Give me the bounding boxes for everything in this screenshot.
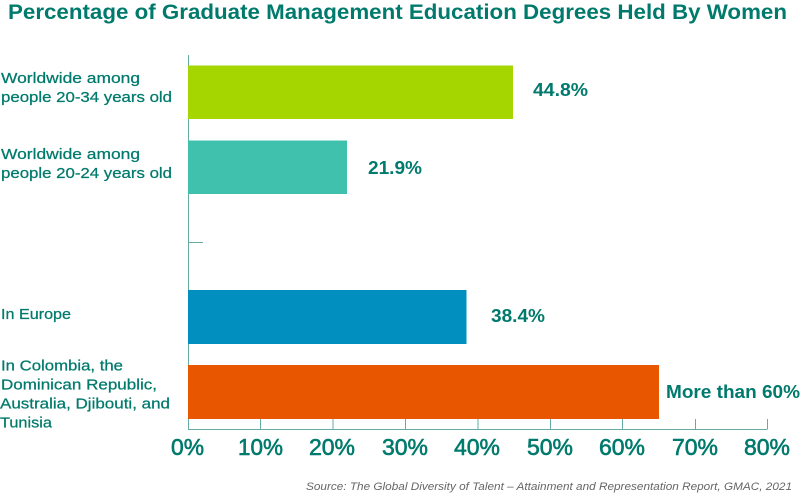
category label: worldwide 20-24: Worldwide among xyxy=(1,146,140,163)
value label: 21.9%: 21.9% xyxy=(368,158,422,178)
x axis labels: 70% xyxy=(672,434,718,460)
category label: worldwide 20-24 xyxy=(1,146,172,182)
bar: worldwide 20-34 xyxy=(188,66,513,119)
category label: worldwide 20-34 xyxy=(1,70,172,106)
bar: worldwide 20-24 xyxy=(188,140,347,194)
value label: more than 60%: More than 60% xyxy=(666,382,800,402)
source note: Source: The Global Diversity of Talent – Attainment and Representation Report, GMAC, 2021 xyxy=(306,481,792,493)
category label: Colombia and others xyxy=(0,358,170,432)
x axis labels: 60% xyxy=(599,434,645,460)
x axis labels: 20% xyxy=(309,434,355,460)
value label: 44.8%: 44.8% xyxy=(533,80,588,100)
x axis labels xyxy=(171,434,790,460)
value label: 38.4%: 38.4% xyxy=(491,306,545,326)
x axis labels: 80% xyxy=(744,434,790,460)
title: Percentage of Graduate Management Education Degrees Held By Women xyxy=(8,1,787,24)
category label: Colombia and others: In Colombia, the xyxy=(1,358,123,374)
bar: Colombia and others xyxy=(188,365,659,419)
x axis labels: 50% xyxy=(527,434,573,460)
category label: Colombia and others: Tunisia xyxy=(0,414,53,432)
category label: Europe: In Europe xyxy=(1,306,71,323)
category label: worldwide 20-34: Worldwide among xyxy=(1,70,140,87)
bar: Europe xyxy=(188,290,466,344)
category label: worldwide 20-34: people 20-34 years old xyxy=(1,89,172,106)
axes xyxy=(188,55,768,430)
category label: worldwide 20-24: people 20-24 years old xyxy=(1,165,172,182)
x axis labels: 10% xyxy=(238,434,283,460)
category label: Colombia and others: Dominican Republic, xyxy=(1,376,157,394)
x axis labels: 30% xyxy=(382,434,428,460)
category label: Colombia and others: Australia, Djibouti, and xyxy=(0,396,170,412)
x axis labels: 0% xyxy=(171,434,204,460)
x axis labels: 40% xyxy=(454,434,500,460)
